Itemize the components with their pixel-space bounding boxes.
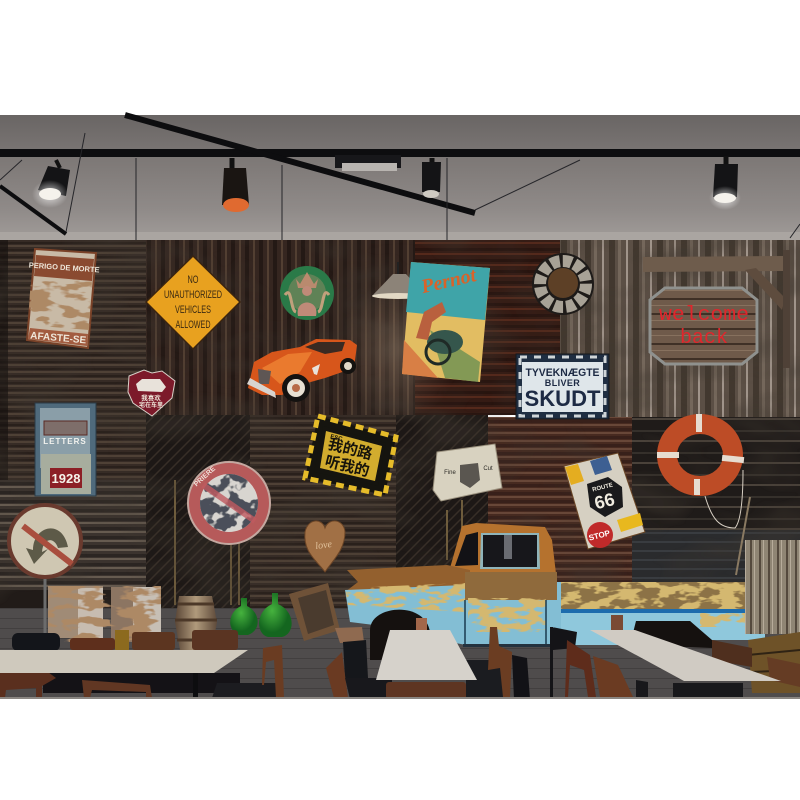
sign: weathered round prohibition (188, 462, 270, 544)
sign: Tyveknaegte bliver skudt: SKUDT (524, 386, 601, 411)
sign: route 66: 66 (592, 489, 617, 513)
vintage life ring (657, 414, 750, 575)
track lighting rails (0, 115, 800, 240)
wall clock (532, 253, 594, 315)
sign: no unauthorized vehicles allowed (146, 256, 240, 349)
sign: yellow caution 我的路听我的 (305, 416, 396, 495)
sign: rusty Afaste-se: AFASTE-SE (30, 331, 87, 346)
sign: no unauthorized vehicles allowed: ALLOWED (176, 319, 211, 331)
sign: rusty Afaste-se: PERIGO DE MORTE (29, 261, 100, 274)
sign: fine cut card (433, 444, 502, 501)
sign: red shield badge: 宅在车里 (139, 401, 163, 409)
baseboard strip (0, 697, 800, 699)
sign: Tyveknaegte bliver skudt: BLIVER (545, 378, 580, 388)
sign: Tyveknaegte bliver skudt (516, 354, 609, 419)
spotlight 2 (222, 158, 249, 212)
sign: no U-turn (9, 505, 81, 640)
dining table: left (0, 650, 248, 673)
sign: weathered round prohibition: PRIERE (193, 465, 217, 488)
sign: rusty Afaste-se (27, 249, 100, 348)
truck hood (345, 565, 470, 592)
mailbox: letters 1928: LETTERS (43, 437, 87, 446)
sign: no unauthorized vehicles allowed: NO (188, 274, 199, 286)
sign: welcome back on wood bracket (643, 250, 790, 368)
mailbox: letters 1928: 1928 (52, 471, 80, 486)
decor: love heart (305, 521, 345, 572)
sign: coffee logo (280, 266, 334, 320)
sign: fine cut card: Fine (444, 470, 456, 476)
spotlight 4 (709, 156, 741, 210)
truck cab (448, 523, 557, 582)
decor: orange vintage car (247, 339, 357, 402)
chairs and furniture (0, 615, 800, 699)
right wooden crate (748, 632, 800, 693)
decor: rusty metal panels (48, 586, 161, 642)
sign: no unauthorized vehicles allowed: UNAUTHORIZED (164, 289, 222, 301)
corrugated wall panels (0, 240, 800, 640)
dining table: right (590, 630, 781, 681)
sign: route 66: STOP (588, 528, 612, 543)
decor: wooden crate (289, 583, 340, 641)
dining table: center (376, 630, 477, 680)
truck bed (561, 582, 765, 610)
sign: no unauthorized vehicles allowed: VEHICLES (175, 304, 211, 316)
sign: route 66: ROUTE (592, 483, 614, 493)
sign: yellow caution 我的路听我的: 听我的 (323, 452, 371, 480)
sign: route 66 (564, 453, 645, 549)
front wheel (370, 610, 430, 660)
sign: welcome back on wood bracket: welcome (659, 304, 749, 327)
sign: welcome back on wood bracket: back (680, 327, 728, 350)
mailbox: letters 1928 (35, 403, 96, 496)
sign: yellow caution 我的路听我的: ESC (330, 434, 344, 443)
sign: red shield badge: 我喜欢 (141, 393, 161, 402)
decor: love heart: love (315, 539, 333, 552)
right barrel (745, 540, 800, 634)
sign: fine cut card: Cut (483, 466, 493, 472)
truck: rusty blue pickup (345, 523, 765, 660)
spotlight 1 (32, 160, 70, 208)
spotlight 3 (422, 158, 441, 198)
decor: green glass bottles (230, 593, 292, 637)
sign: Tyveknaegte bliver skudt: TYVEKNÆGTE (526, 367, 600, 379)
sign: red shield badge (128, 370, 175, 416)
decor: wooden barrel (175, 596, 217, 650)
ceiling (0, 115, 800, 240)
sign: lamp on wall (372, 262, 425, 299)
sign: yellow caution 我的路听我的: 我的路 (326, 435, 374, 463)
poster: motorcycle (402, 262, 490, 382)
poster: motorcycle: Pernot (418, 264, 480, 298)
floor (0, 608, 800, 699)
truck door (465, 582, 561, 645)
